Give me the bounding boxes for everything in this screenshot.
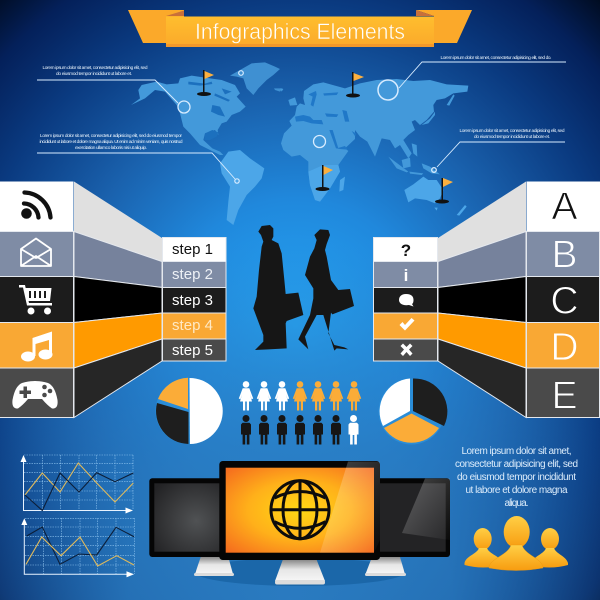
map captions (40, 55, 565, 151)
monitor: right (360, 478, 450, 576)
icon: globe (271, 481, 329, 539)
monitor: centre (219, 461, 380, 584)
trapezoids (74, 182, 162, 418)
pictogram: women (239, 381, 361, 410)
panel: right icon and letter stack (374, 182, 600, 418)
monitor shadow (195, 558, 405, 586)
pie chart: left (156, 378, 223, 444)
icon: envelope (21, 238, 51, 266)
text block: aliqua. (504, 498, 528, 509)
title ribbon (128, 10, 472, 47)
letters: B (551, 234, 578, 276)
line chart: bottom (21, 518, 134, 577)
letter column (526, 182, 600, 418)
text block: Lorem ipsum dolor sit amet, (462, 446, 572, 457)
letters: C (550, 280, 579, 322)
small icons: question, info, speech, check, cross: ? (401, 241, 411, 260)
small icons: question, info, speech, check, cross: i (404, 266, 408, 285)
step labels: step 5 (172, 342, 213, 359)
text block: consectetur adipisicing elit, sed (455, 459, 578, 470)
map captions: incididunt ut labore et dolore magna aliqua. Ut enim ad minim veniam, quis nostrud (40, 139, 183, 145)
map captions: Lorem ipsum dolor sit amet, consectetur adipisicing elit, sed do eiusmod tempor (40, 133, 182, 139)
silhouette: businessman (253, 225, 303, 350)
pictogram: men (241, 415, 358, 444)
text block: do eiusmod tempor incididunt (457, 472, 576, 483)
icon: cart (19, 285, 52, 314)
map callout lines and markers (37, 62, 566, 183)
panel: left icon and step stack (0, 182, 226, 418)
step labels: step 2 (172, 266, 213, 283)
icon: gamepad (12, 381, 58, 409)
step column (162, 238, 226, 361)
trapezoids (438, 182, 526, 418)
pie chart: right (378, 378, 447, 444)
map captions: do eiusmod tempor incididunt ut labore et. (474, 134, 550, 140)
world map (131, 62, 468, 225)
map captions: do eiusmod tempor incididunt ut labore et. (56, 71, 132, 77)
letters: D (550, 326, 579, 369)
map captions: Lorem ipsum dolor sit amet, consectetur adipisicing elit, sed (460, 128, 565, 134)
icon: music note (21, 332, 52, 362)
americas (131, 62, 283, 225)
monitor: left (149, 478, 239, 576)
map flags (197, 70, 453, 204)
letters: E (551, 374, 578, 418)
line chart: top (20, 455, 133, 514)
map captions: exercitation ullamco laboris nisi ut aliquip. (75, 145, 147, 151)
step labels: step 4 (172, 317, 213, 334)
letters (550, 186, 579, 418)
icon column (0, 182, 74, 418)
small icons: question, info, speech, check, cross (399, 241, 414, 356)
small icon column (374, 238, 438, 361)
step labels: step 1 (172, 241, 213, 258)
title: Infographics Elements (195, 19, 405, 44)
silhouette: businesswoman (298, 229, 354, 351)
step labels: step 3 (172, 292, 213, 309)
text block: ut labore et dolore magna (466, 485, 568, 496)
map captions: Lorem ipsum dolor sit amet, consectetur adipisicing elit, sed (42, 65, 148, 71)
letters: A (551, 186, 578, 228)
map captions: Lorem ipsum dolor sit amet, consectetur adipisicing elit, sed do. (440, 55, 552, 61)
europe asia africa oceania (280, 79, 468, 216)
icon: users group (464, 516, 568, 570)
icon: rss (21, 192, 50, 219)
step labels (172, 241, 213, 359)
text block (455, 446, 578, 509)
